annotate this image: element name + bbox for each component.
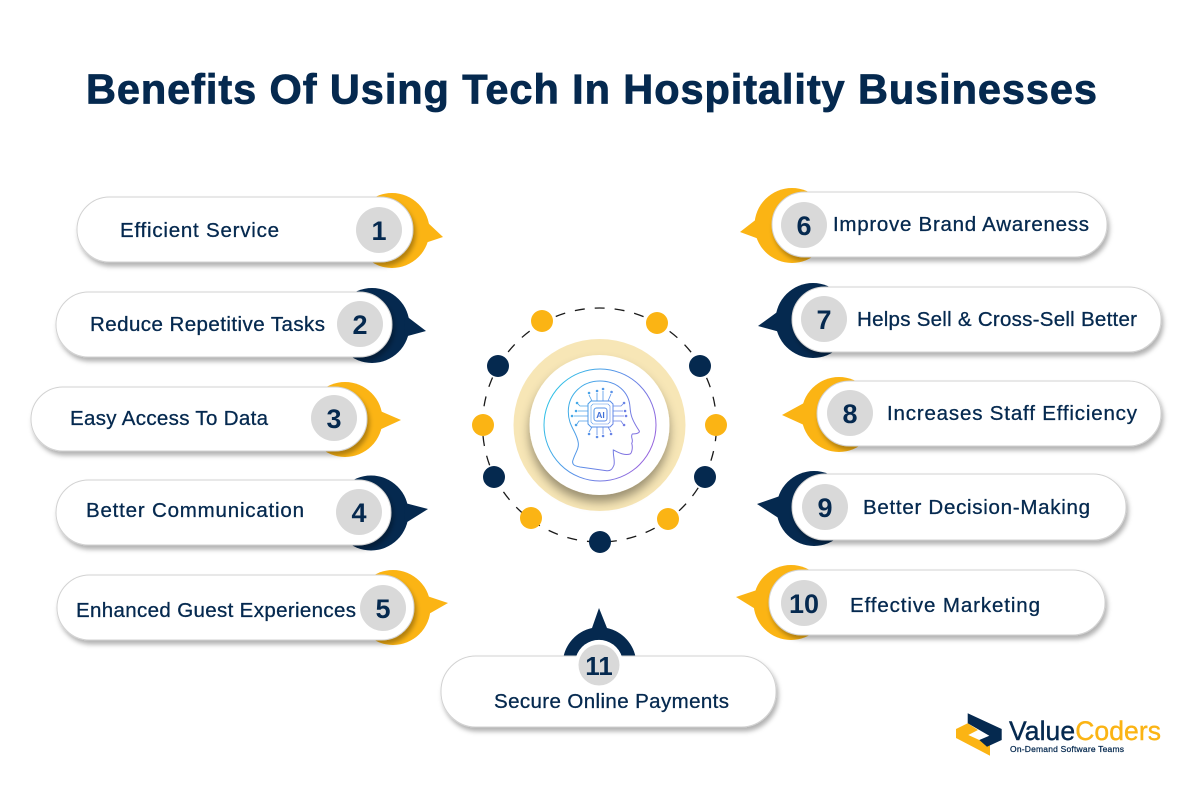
icon: head outline with chip xyxy=(568,381,639,471)
navy dots xyxy=(483,355,716,553)
number badge 2: 2 xyxy=(352,310,368,340)
label: Enhanced Guest Experiences xyxy=(76,599,356,622)
label: Increases Staff Efficiency xyxy=(887,402,1138,425)
number badge 7 xyxy=(801,296,847,342)
item 3: Easy Access To Data xyxy=(31,382,401,457)
number badge 11 xyxy=(578,644,620,686)
central AI head graphic xyxy=(472,308,727,553)
number badge 7: 7 xyxy=(816,305,832,335)
number badge 3: 3 xyxy=(326,404,342,434)
item 4: Better Communication xyxy=(56,476,428,550)
number badge 6 xyxy=(781,202,827,248)
item 1: Efficient Service xyxy=(77,193,443,268)
pointer: navy crescent xyxy=(757,471,852,546)
label: Easy Access To Data xyxy=(70,407,269,430)
pointer: navy crescent xyxy=(334,476,428,550)
pointer: navy arc xyxy=(563,608,636,660)
number badge 3 xyxy=(311,395,357,441)
pill xyxy=(56,480,391,545)
pill xyxy=(77,197,413,262)
thin gradient ring xyxy=(544,369,656,481)
label: Efficient Service xyxy=(120,219,279,242)
badge cut-out xyxy=(576,640,622,657)
pill xyxy=(792,287,1161,352)
pill xyxy=(772,192,1107,257)
logo mark xyxy=(956,713,1002,756)
logo wordmark: ValueCoders xyxy=(1009,716,1161,746)
number badge 4 xyxy=(336,489,382,535)
number badge 5: 5 xyxy=(375,594,391,624)
pill xyxy=(31,387,367,451)
pill xyxy=(817,381,1161,446)
number badge 8 xyxy=(827,390,873,436)
number badge 1 xyxy=(356,207,402,253)
item 5: Enhanced Guest Experiences xyxy=(57,570,448,645)
pointer: yellow crescent xyxy=(308,382,401,457)
icon text: AI: AI xyxy=(596,410,605,420)
pointer: yellow crescent xyxy=(356,570,448,645)
item 7: Helps Sell & Cross-Sell Better xyxy=(758,283,1161,358)
pill xyxy=(792,474,1126,540)
number badge 10 xyxy=(781,580,827,626)
pill xyxy=(769,570,1105,635)
number badge 6: 6 xyxy=(796,211,812,241)
pointer: yellow crescent xyxy=(354,193,443,268)
number badge 11: 11 xyxy=(585,651,613,681)
number badge 9: 9 xyxy=(817,493,833,523)
label: Better Communication xyxy=(86,499,304,522)
number badge 8: 8 xyxy=(842,399,858,429)
label: Reduce Repetitive Tasks xyxy=(90,313,325,336)
title: Benefits Of Using Tech In Hospitality Businesses xyxy=(86,66,1097,112)
item 9: Better Decision-Making xyxy=(757,471,1126,546)
item 11: Secure Online Payments xyxy=(441,608,776,727)
label: Helps Sell & Cross-Sell Better xyxy=(857,308,1137,331)
label: Effective Marketing xyxy=(850,594,1040,617)
pill xyxy=(57,575,414,640)
pale ring xyxy=(514,339,686,511)
pointer: yellow crescent xyxy=(782,377,876,452)
logo tagline: On-Demand Software Teams xyxy=(1010,744,1124,754)
number badge 4: 4 xyxy=(351,498,367,528)
number badge 10: 10 xyxy=(789,589,819,619)
logo: ValueCoders xyxy=(956,713,1161,756)
white disc xyxy=(530,355,670,495)
pointer: yellow crescent xyxy=(736,565,828,640)
pointer: yellow crescent xyxy=(740,188,830,263)
number badge 9 xyxy=(802,484,848,530)
item 2: Reduce Repetitive Tasks xyxy=(56,288,426,363)
pointer: navy crescent xyxy=(758,283,850,358)
number badge 5 xyxy=(360,585,406,631)
item 8: Increases Staff Efficiency xyxy=(782,377,1161,452)
orange dots xyxy=(472,310,727,530)
pill xyxy=(441,656,776,727)
pill xyxy=(56,292,392,357)
label: Secure Online Payments xyxy=(494,690,729,713)
label: Better Decision-Making xyxy=(863,496,1090,519)
pointer: navy crescent xyxy=(334,288,426,363)
number badge 2 xyxy=(337,301,383,347)
item 10: Effective Marketing xyxy=(736,565,1105,640)
label: Improve Brand Awareness xyxy=(833,213,1089,236)
number badge 1: 1 xyxy=(371,216,387,246)
item 6: Improve Brand Awareness xyxy=(740,188,1107,263)
